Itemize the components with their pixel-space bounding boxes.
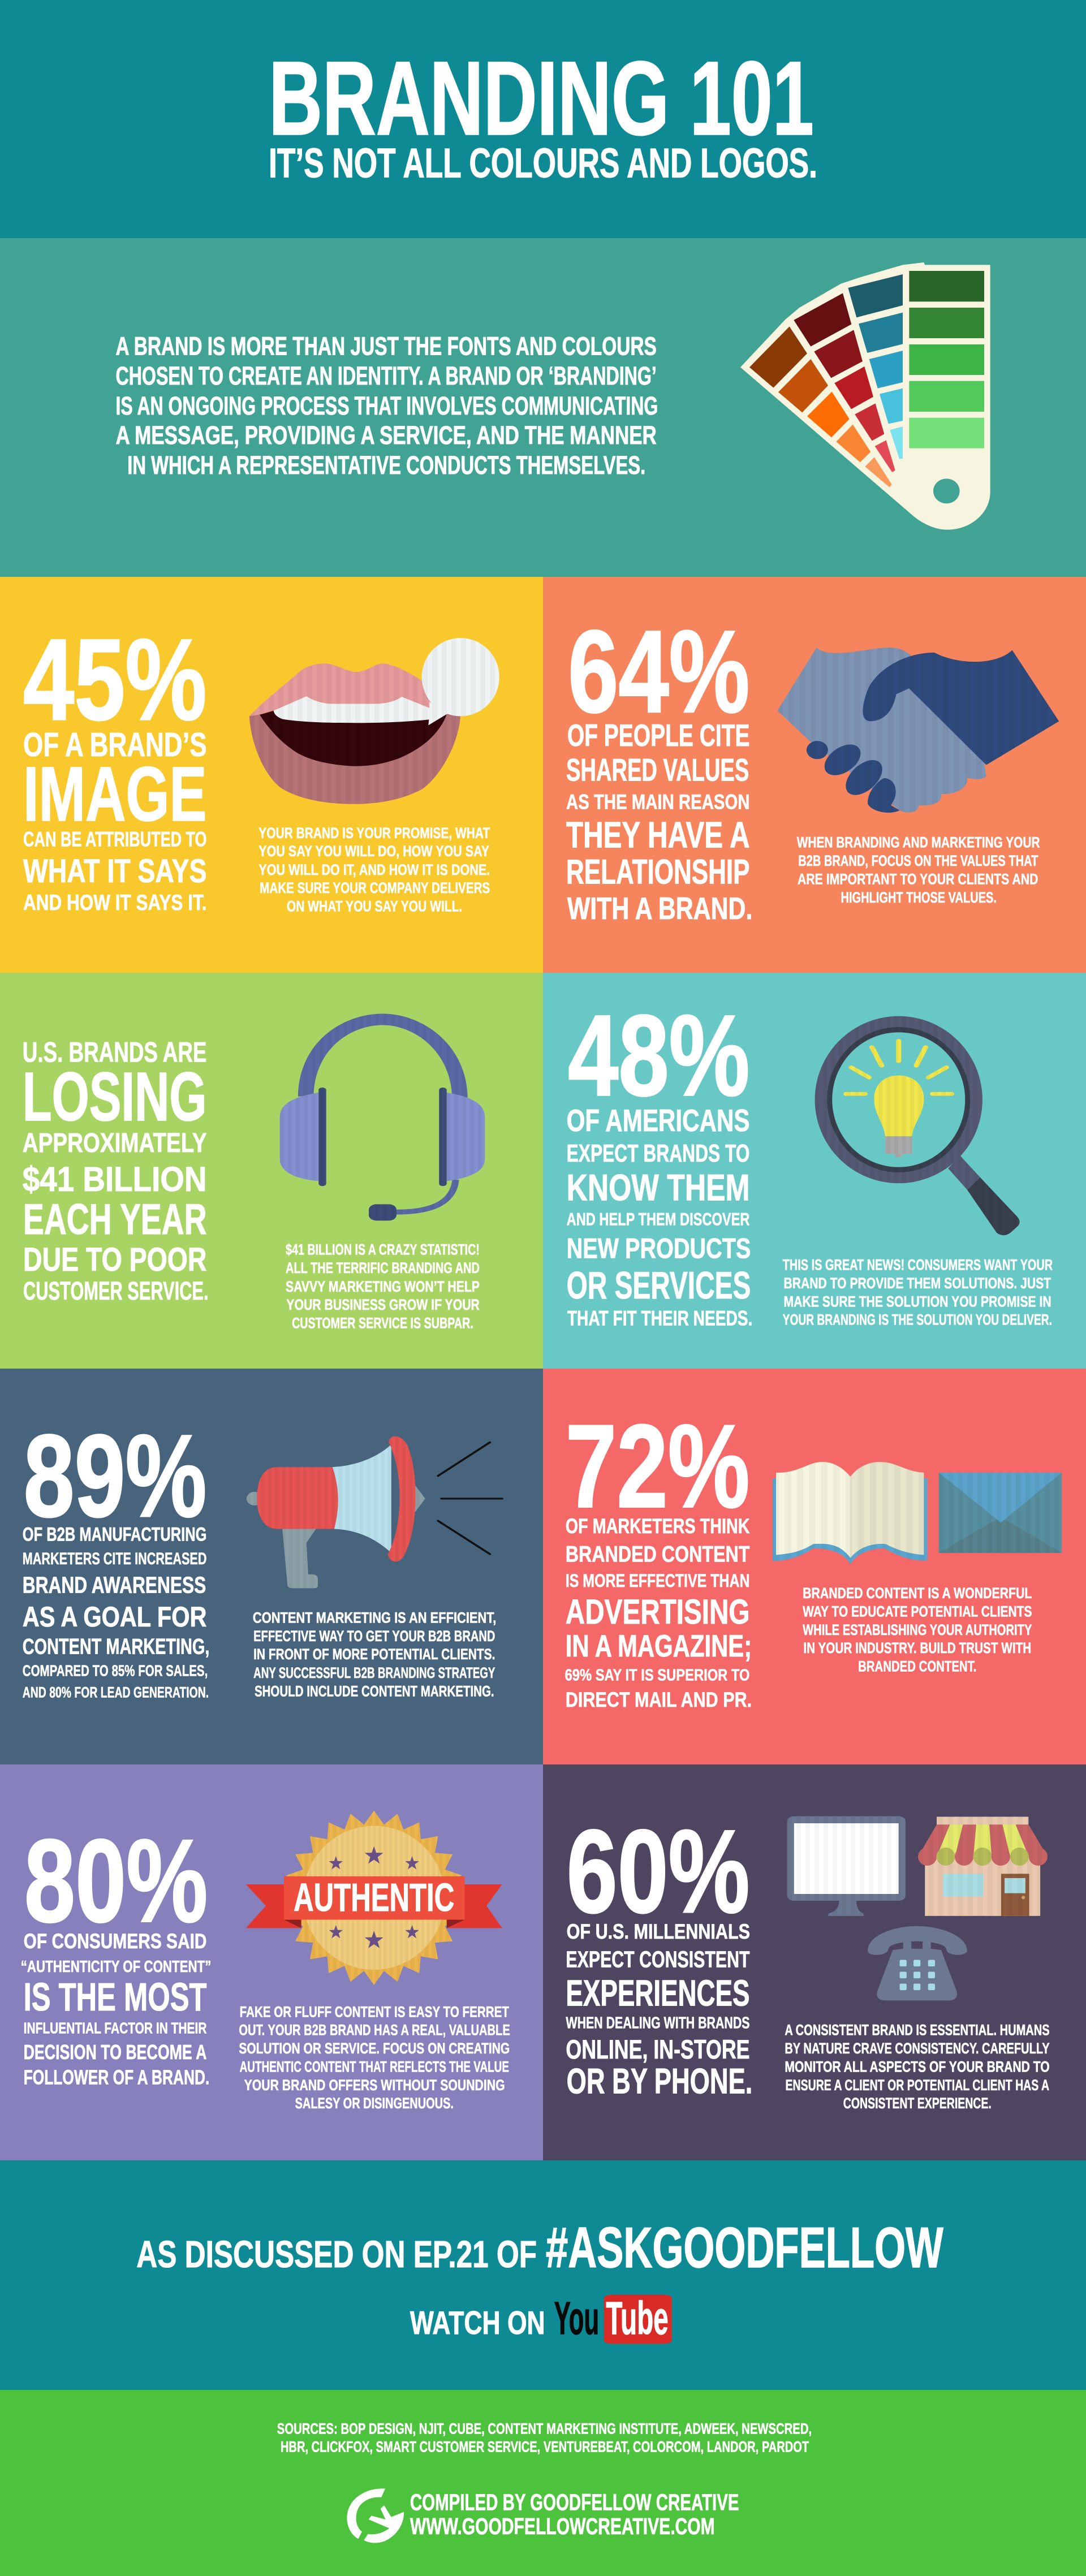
stat caption: INFLUENTIAL FACTOR IN THEIR: [24, 2020, 206, 2037]
stat: 80%: 80%: [24, 1815, 208, 1947]
stat caption: THEY HAVE A: [566, 815, 749, 856]
panel: 64% shared values: [543, 577, 1086, 973]
body text: EFFECTIVE WAY TO GET YOUR B2B BRAND: [253, 1627, 495, 1645]
stat: 89%: 89%: [24, 1410, 206, 1541]
stat caption: DECISION TO BECOME A: [24, 2041, 206, 2064]
stat caption: AND HOW IT SAYS IT.: [23, 890, 206, 915]
body text: MAKE SURE YOUR COMPANY DELIVERS: [260, 879, 490, 896]
stat caption: NEW PRODUCTS: [567, 1232, 751, 1264]
stat caption: AS THE MAIN REASON: [566, 790, 749, 814]
credit: [410, 2489, 739, 2539]
icon: lips with speech bubble: [249, 638, 499, 804]
panel: watch call to action: WATCH ON: [410, 2305, 545, 2341]
stat: 64%: 64%: [568, 606, 749, 737]
headline stat text: [23, 1036, 209, 1305]
body text: [803, 1584, 1032, 1675]
body text: FAKE OR FLUFF CONTENT IS EASY TO FERRET: [240, 2003, 509, 2020]
body text: CUSTOMER SERVICE IS SUBPAR.: [292, 1314, 473, 1331]
stat caption: IS MORE EFFECTIVE THAN: [566, 1571, 749, 1591]
stat caption: OF U.S. MILLENNIALS: [567, 1919, 750, 1943]
stat caption: BRAND AWARENESS: [23, 1572, 206, 1598]
stat caption: IMAGE: [23, 750, 206, 837]
body text: [253, 1609, 496, 1699]
headline stat text: $41 BILLION: [23, 1159, 206, 1198]
headline stat text: U.S. BRANDS ARE: [23, 1036, 206, 1068]
body text: ANY SUCCESSFUL B2B BRANDING STRATEGY: [253, 1664, 495, 1681]
stat caption: OF MARKETERS THINK: [566, 1515, 749, 1538]
stat caption: OF PEOPLE CITE: [567, 718, 749, 753]
body text: OUT. YOUR B2B BRAND HAS A REAL, VALUABLE: [239, 2021, 510, 2038]
icon: megaphone: [247, 1436, 425, 1588]
panel: 60% millennials: [543, 1764, 1086, 2160]
icon: storefront: [918, 1816, 1048, 1916]
body text: [286, 1241, 480, 1331]
panel: intro: [0, 238, 1086, 577]
icon: computer monitor: [787, 1816, 906, 1916]
body text: [783, 1255, 1053, 1328]
icon: magnifying glass with light bulb: [815, 1016, 1020, 1235]
stat: 48%: 48%: [568, 991, 749, 1120]
stat caption: KNOW THEM: [567, 1167, 749, 1209]
body text: $41 BILLION IS A CRAZY STATISTIC!: [286, 1241, 480, 1258]
body text: CONTENT MARKETING IS AN EFFICIENT,: [253, 1609, 496, 1626]
stat caption: ADVERTISING: [566, 1592, 749, 1631]
stat caption: OF AMERICANS: [567, 1103, 749, 1138]
stat caption: RELATIONSHIP: [566, 852, 749, 891]
intro text block: [115, 332, 658, 480]
body text: [785, 2021, 1050, 2112]
icon: colour swatch fan: [740, 262, 990, 530]
icon: headset: [280, 1020, 485, 1220]
stat caption: AS A GOAL FOR: [23, 1601, 206, 1633]
body text: [797, 834, 1040, 906]
stat caption: EXPECT CONSISTENT: [566, 1947, 750, 1973]
stat: 60%: 60%: [567, 1806, 749, 1938]
sources: [277, 2420, 812, 2456]
panel: $41 billion customer service: CUSTOMER SERVICE.: [23, 1277, 209, 1305]
stat caption: [23, 1524, 209, 1701]
stat caption: OF B2B MANUFACTURING: [23, 1524, 206, 1545]
stat caption: CAN BE ATTRIBUTED TO: [23, 827, 206, 851]
stat caption: [565, 1515, 752, 1712]
body text: YOUR BUSINESS GROW IF YOUR: [286, 1296, 480, 1313]
stat caption: [21, 1929, 211, 2089]
body text: YOU SAY YOU WILL DO, HOW YOU SAY: [258, 842, 489, 860]
stat caption: OF A BRAND’S: [23, 726, 206, 763]
panel: header: [0, 0, 1086, 238]
stat caption: THAT FIT THEIR NEEDS.: [567, 1307, 752, 1330]
body text: [239, 2003, 510, 2112]
body text: ON WHAT YOU SAY YOU WILL.: [287, 897, 462, 914]
icon: YouTube logo: You: [554, 2293, 599, 2344]
stat caption: [23, 726, 206, 915]
body text: BRANDED CONTENT.: [858, 1658, 976, 1675]
stat caption: 69% SAY IT IS SUPERIOR TO: [565, 1665, 749, 1684]
body text: YOU WILL DO IT, AND HOW IT IS DONE.: [258, 861, 490, 878]
stat caption: MARKETERS CITE INCREASED: [23, 1550, 206, 1568]
stat caption: DIRECT MAIL AND PR.: [566, 1688, 752, 1712]
icon: authentic badge: [246, 1811, 502, 1985]
stat caption: WITH A BRAND.: [567, 891, 752, 926]
panel: 72% branded content: [543, 1369, 1086, 1764]
panel: 48% Americans: [543, 973, 1086, 1369]
icon: telephone: [868, 1926, 967, 2000]
stat caption: [566, 1919, 752, 2102]
headline stat text: DUE TO POOR: [23, 1240, 206, 1278]
icon: envelope: [939, 1473, 1062, 1553]
stat caption: OR BY PHONE.: [567, 2061, 752, 2102]
body text: SALESY OR DISINGENUOUS.: [295, 2094, 454, 2112]
stat caption: CONTENT MARKETING,: [23, 1634, 209, 1659]
headline stat text: EACH YEAR: [23, 1196, 206, 1244]
stat caption: OR SERVICES: [567, 1264, 751, 1307]
icon: handshake: [777, 648, 1059, 813]
stat caption: FOLLOWER OF A BRAND.: [24, 2066, 209, 2089]
stat caption: SHARED VALUES: [566, 753, 749, 788]
panel: 80% authenticity: [0, 1764, 543, 2160]
panel: $41 billion customer service: [0, 973, 543, 1369]
stat caption: EXPECT BRANDS TO: [567, 1140, 749, 1167]
icon: YouTube logo: [554, 2293, 672, 2344]
body text: AUTHENTIC CONTENT THAT REFLECTS THE VALUE: [240, 2058, 509, 2076]
stat: 72%: 72%: [566, 1400, 749, 1533]
headline stat text: APPROXIMATELY: [23, 1128, 206, 1158]
icon: Goodfellow logo: [347, 2488, 404, 2543]
body text: SAVVY MARKETING WON’T HELP: [286, 1278, 480, 1295]
stat caption: WHAT IT SAYS: [23, 853, 206, 890]
stat caption: [566, 718, 752, 926]
panel: watch call to action: Tube: [606, 2293, 669, 2344]
stat caption: AND HELP THEM DISCOVER: [567, 1209, 749, 1229]
body text: SOLUTION OR SERVICE. FOCUS ON CREATING: [239, 2039, 510, 2057]
panel: footer: [0, 2390, 1086, 2576]
panel: 45% brand image: [0, 577, 543, 973]
panel: watch call to action: [0, 2160, 1086, 2390]
stat caption: ONLINE, IN-STORE: [566, 2035, 749, 2065]
stat caption: OF CONSUMERS SAID: [24, 1929, 206, 1953]
icon: open book: [773, 1462, 928, 1564]
headline stat text: LOSING: [23, 1058, 206, 1135]
body text: ALL THE TERRIFIC BRANDING AND: [286, 1259, 480, 1276]
body text: YOUR BRAND OFFERS WITHOUT SOUNDING: [244, 2076, 505, 2094]
stat caption: COMPARED TO 85% FOR SALES,: [23, 1662, 208, 1680]
body text: SHOULD INCLUDE CONTENT MARKETING.: [255, 1682, 494, 1699]
icon: sound lines: [438, 1442, 502, 1554]
stat caption: IS THE MOST: [24, 1975, 206, 2019]
stat caption: EXPERIENCES: [566, 1973, 749, 2013]
body text: [258, 824, 490, 914]
panel: 89% B2B marketers: [0, 1369, 543, 1764]
body text: YOUR BRAND IS YOUR PROMISE, WHAT: [258, 824, 490, 842]
stat caption: [567, 1103, 752, 1330]
body text: IN FRONT OF MORE POTENTIAL CLIENTS.: [253, 1645, 495, 1663]
stat caption: AND 80% FOR LEAD GENERATION.: [23, 1684, 209, 1701]
icon: authentic badge: AUTHENTIC: [294, 1875, 454, 1919]
stat caption: IN A MAGAZINE;: [566, 1628, 752, 1663]
stat: 45%: 45%: [23, 615, 206, 744]
stat caption: WHEN DEALING WITH BRANDS: [566, 2014, 749, 2032]
stat caption: BRANDED CONTENT: [566, 1542, 749, 1567]
stat caption: “AUTHENTICITY OF CONTENT”: [21, 1957, 211, 1976]
